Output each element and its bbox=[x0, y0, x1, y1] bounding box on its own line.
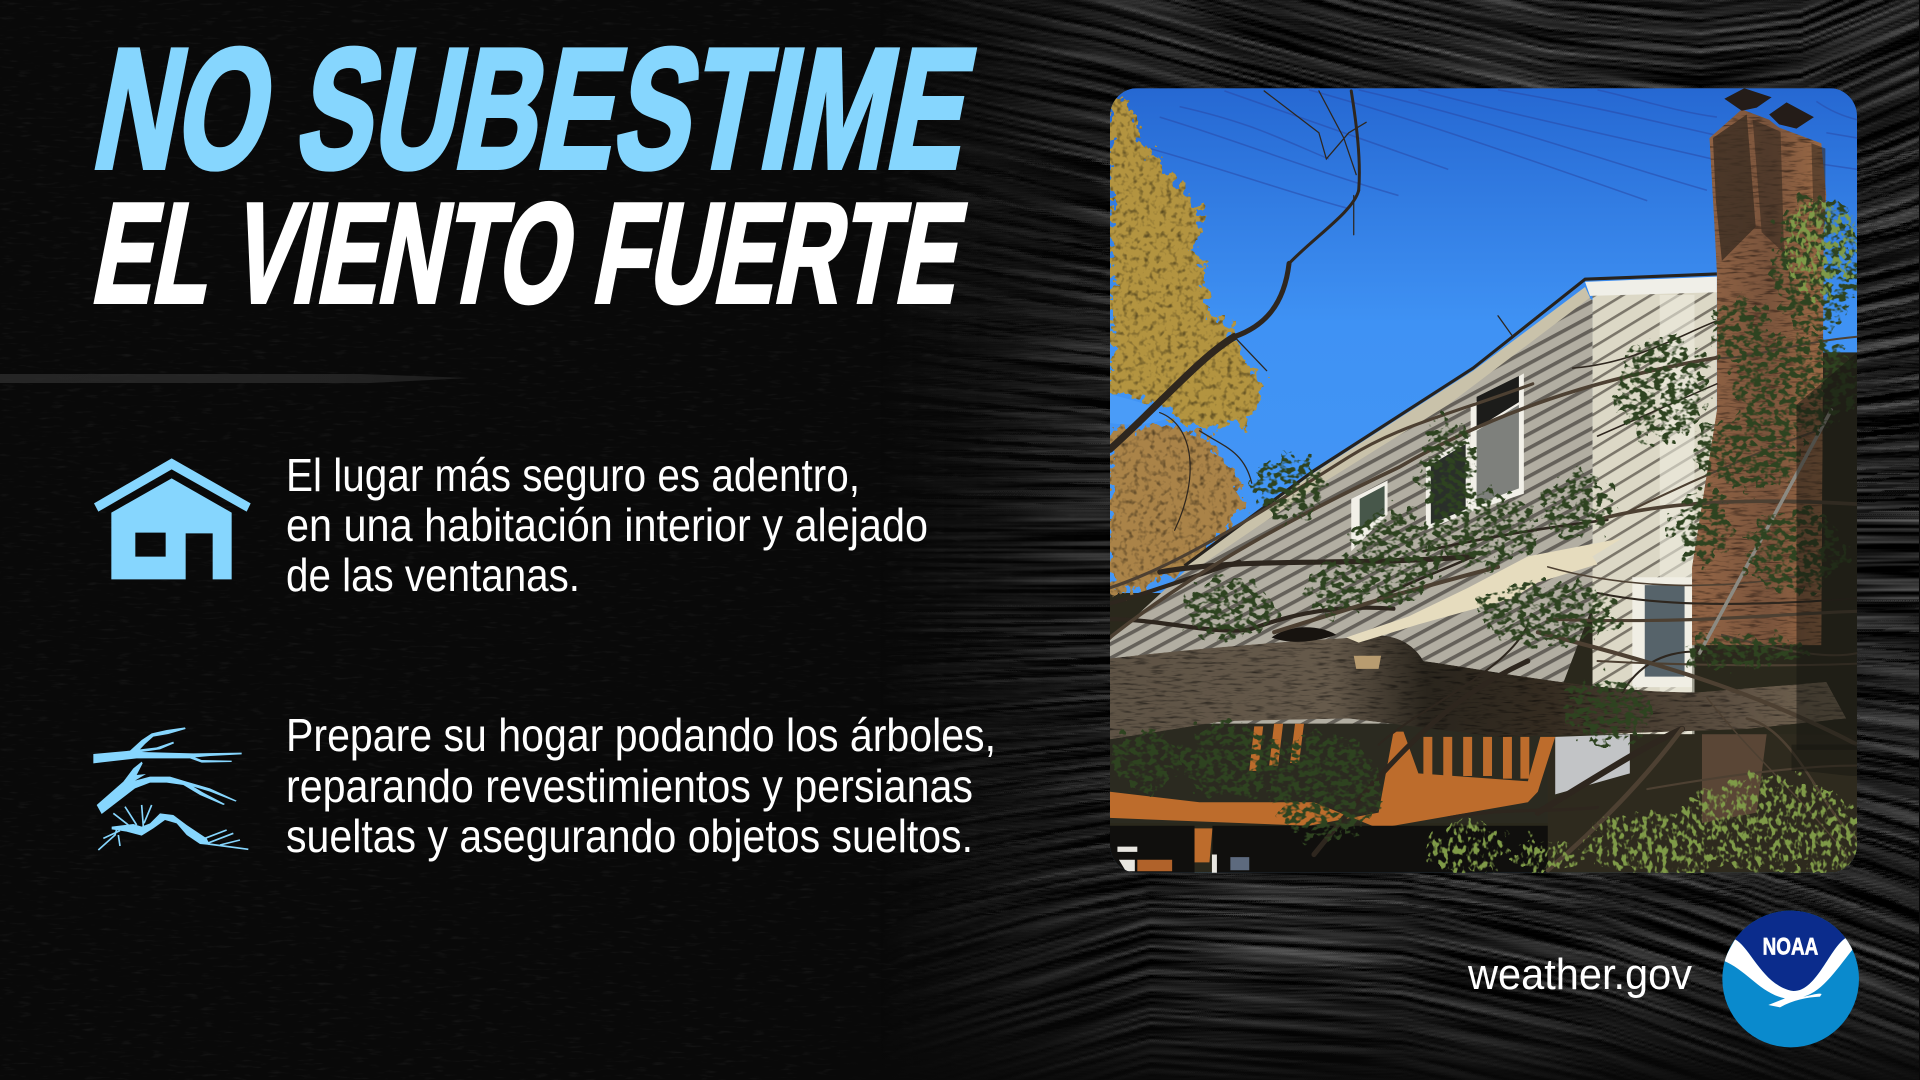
text block: prepare home bbox=[286, 709, 996, 862]
logo: NOAA: NOAA bbox=[1763, 934, 1818, 961]
broken wood splinter bbox=[1346, 538, 1622, 643]
eaves and fascia bbox=[1185, 287, 1590, 569]
chimney bbox=[1692, 109, 1826, 645]
title line 2: EL VIENTO FUERTE bbox=[83, 174, 978, 333]
text block: prepare home: sueltas y asegurando objetos sueltos. bbox=[286, 810, 973, 862]
windows bbox=[1471, 373, 1524, 512]
text block: safest place: en una habitación interior y alejado bbox=[286, 499, 928, 551]
text block: safest place: El lugar más seguro es adentro, bbox=[286, 449, 860, 501]
title bbox=[82, 13, 989, 333]
icon: house bbox=[94, 458, 251, 579]
text block: prepare home: Prepare su hogar podando los árboles, bbox=[286, 709, 996, 761]
logo: NOAA bbox=[1707, 890, 1873, 1057]
sliding white wall bbox=[1555, 734, 1630, 794]
sky gaps in tree bbox=[1110, 394, 1170, 425]
sky bbox=[1110, 88, 1857, 873]
branches bbox=[1110, 91, 1857, 870]
website label: weather.gov bbox=[1467, 950, 1692, 999]
dark bottom band with fragments bbox=[1110, 826, 1548, 873]
text block: prepare home: reparando revestimientos y persianas bbox=[286, 760, 973, 812]
trunk bbox=[1110, 635, 1846, 739]
deck bbox=[1110, 724, 1555, 862]
dark ground base bbox=[1110, 352, 1857, 873]
dark lower right foliage shade bbox=[1796, 352, 1857, 750]
photo: fallen tree on house bbox=[1110, 88, 1871, 875]
text block: safest place: de las ventanas. bbox=[286, 549, 580, 601]
lower wall shadow and deck background bbox=[1110, 724, 1558, 823]
text block: safest place bbox=[286, 449, 928, 601]
oak leaves light bbox=[1428, 201, 1871, 875]
autumn tree bbox=[1110, 96, 1264, 598]
icon: broken branches bbox=[93, 727, 248, 850]
title line 1: NO SUBESTIME bbox=[82, 13, 989, 204]
bottom right edge streak shade bbox=[1792, 745, 1857, 776]
house walls bbox=[1110, 295, 1598, 724]
oak leaves dark bbox=[1110, 196, 1861, 839]
sky wind streaks bbox=[1150, 90, 1857, 209]
